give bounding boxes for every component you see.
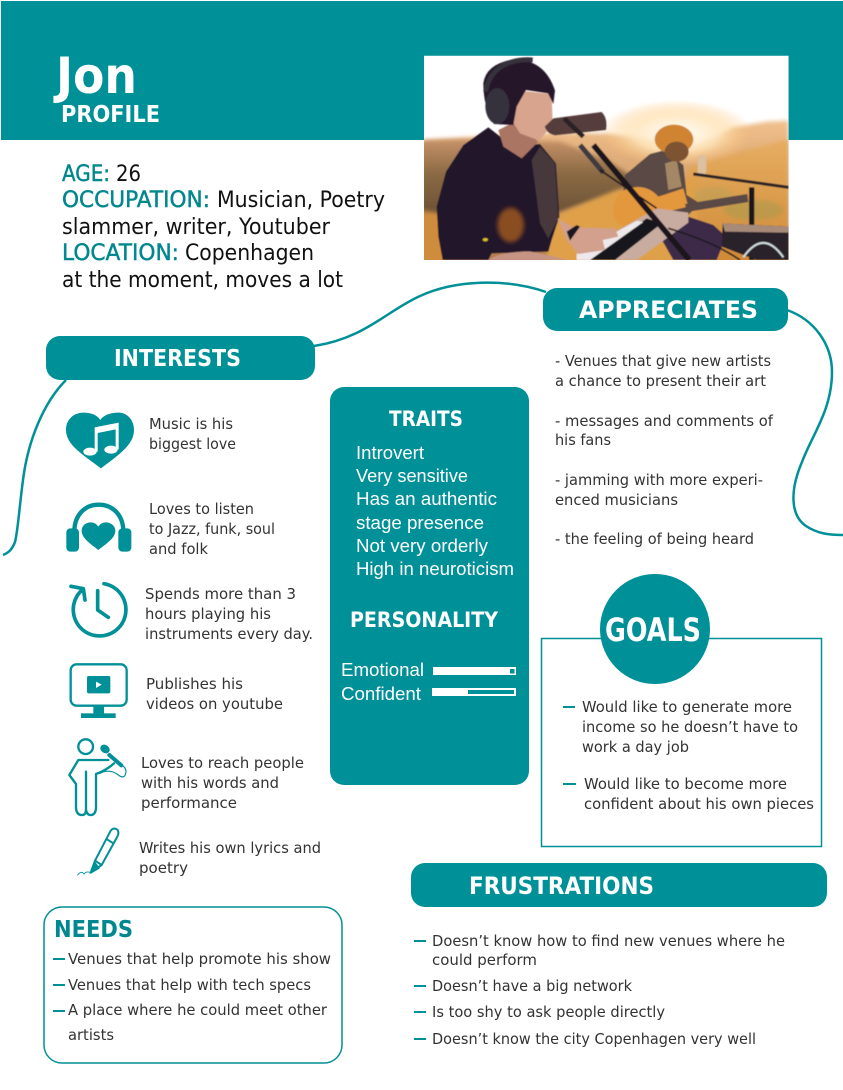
needs list: Venues that help with tech specs — [68, 976, 311, 994]
appreciates list: his fans — [555, 431, 611, 449]
profile details — [62, 162, 385, 293]
appreciates list — [555, 352, 774, 548]
traits list: stage presence — [356, 512, 484, 533]
appreciates list: enced musicians — [555, 491, 678, 509]
traits list: High in neuroticism — [356, 558, 514, 579]
text: reach people: Loves to reach people — [141, 754, 304, 772]
heading: appreciates: APPRECIATES — [579, 296, 758, 324]
heading: personality: PERSONALITY — [350, 608, 499, 632]
text: youtube — [146, 675, 283, 713]
frustrations list: Doesn’t have a big network — [432, 977, 632, 995]
text: practice hours: Spends more than 3 — [145, 585, 296, 603]
subtitle: PROFILE: PROFILE — [61, 102, 160, 128]
needs list: A place where he could meet other — [68, 1001, 328, 1019]
needs list: Venues that help promote his show — [68, 950, 331, 968]
traits list — [356, 442, 514, 579]
panel: needs — [44, 907, 342, 1063]
slider: confident: Confident — [341, 683, 421, 704]
panel: goals — [542, 574, 822, 846]
text: lyrics: poetry — [139, 859, 188, 877]
right microphone and stand — [698, 155, 706, 175]
profile details: LOCATION: — [62, 241, 179, 266]
keyboard — [577, 208, 688, 260]
icon: monitor with play button — [71, 664, 127, 718]
icon: performer with microphone — [69, 739, 126, 815]
connector curves — [3, 283, 843, 555]
golden grass — [687, 139, 789, 263]
goals badge — [600, 574, 710, 684]
text: music genres: to Jazz, funk, soul — [149, 520, 275, 538]
goals badge: GOALS — [605, 611, 701, 649]
goal: confidence — [563, 775, 814, 813]
equipment case — [722, 223, 789, 260]
singer microphone — [545, 112, 606, 135]
heading: appreciates — [543, 288, 788, 331]
frustrations list: Is too shy to ask people directly — [432, 1003, 665, 1021]
text: music love: biggest love — [149, 435, 236, 453]
heading: traits: TRAITS — [389, 407, 463, 431]
traits list: Not very orderly — [356, 535, 489, 556]
appreciates list: - the feeling of being heard — [555, 530, 754, 548]
needs list — [53, 950, 331, 1044]
text: youtube: videos on youtube — [146, 695, 283, 713]
slider: confident — [341, 683, 516, 704]
heading: interests — [46, 336, 315, 380]
appreciates list: a chance to present their art — [555, 372, 766, 390]
profile details: 26 — [116, 162, 141, 187]
text: music genres — [149, 500, 275, 558]
heading: interests: INTERESTS — [114, 344, 241, 372]
traits list: Introvert — [356, 442, 424, 463]
profile details: at the moment, moves a lot — [62, 268, 343, 293]
title: Jon: Jon — [53, 47, 137, 105]
text: reach people: with his words and — [141, 774, 279, 792]
profile details: slammer, writer, Youtuber — [62, 215, 331, 240]
frustrations list: could perform — [432, 951, 537, 969]
text: practice hours — [145, 585, 313, 643]
profile details: OCCUPATION: — [62, 188, 210, 213]
text: reach people: performance — [141, 794, 237, 812]
icon: pencil — [77, 828, 118, 875]
far hills — [424, 121, 789, 263]
text: music love — [149, 415, 236, 453]
goal: income: work a day job — [582, 738, 689, 756]
frustrations list: Doesn’t know the city Copenhagen very well — [432, 1030, 756, 1048]
icon: clock with arrow — [71, 584, 126, 636]
goal: income: income so he doesn’t have to — [582, 718, 798, 736]
profile details: Musician, Poetry — [217, 188, 385, 213]
profile details: AGE: — [62, 162, 110, 187]
photo: musician singing at sunset — [420, 56, 789, 263]
heading: needs: NEEDS — [54, 917, 133, 943]
singer forearm and hand — [488, 251, 568, 260]
header banner — [1, 1, 843, 140]
goal: confidence: confident about his own pieces — [584, 795, 814, 813]
needs list: artists — [68, 1026, 114, 1044]
appreciates list: - jamming with more experi- — [555, 471, 763, 489]
text: music love: Music is his — [149, 415, 233, 433]
panel: traits and personality — [330, 387, 529, 785]
frustrations list — [414, 932, 785, 1048]
text: music genres: Loves to listen — [149, 500, 254, 518]
singer hoodie — [437, 127, 559, 260]
traits list: Has an authentic — [356, 488, 497, 509]
text: practice hours: instruments every day. — [145, 625, 313, 643]
text: lyrics — [139, 839, 321, 877]
text: music genres: and folk — [149, 540, 208, 558]
singer neck and head — [498, 122, 538, 158]
guitar — [613, 187, 688, 227]
jeans — [660, 215, 726, 260]
goal: income: Would like to generate more — [582, 698, 792, 716]
goal: confidence: Would like to become more — [584, 775, 787, 793]
second musician — [622, 150, 698, 215]
text: practice hours: hours playing his — [145, 605, 271, 623]
slider: emotional — [341, 659, 516, 680]
icon: heart with music note — [66, 413, 134, 468]
text: lyrics: Writes his own lyrics and — [139, 839, 321, 857]
profile details: Copenhagen — [185, 241, 314, 266]
heading: frustrations: FRUSTRATIONS — [469, 872, 654, 900]
goal: income — [563, 698, 798, 756]
appreciates list: - Venues that give new artists — [555, 352, 771, 370]
heading: frustrations — [411, 863, 827, 907]
icon: headphones with heart — [66, 505, 131, 552]
text: reach people — [141, 754, 304, 812]
slider: emotional: Emotional — [341, 659, 424, 680]
frustrations list: Doesn’t know how to find new venues where he — [432, 932, 785, 950]
text: youtube: Publishes his — [146, 675, 243, 693]
appreciates list: - messages and comments of — [555, 412, 774, 430]
tree slopes — [420, 139, 640, 217]
traits list: Very sensitive — [356, 465, 468, 486]
